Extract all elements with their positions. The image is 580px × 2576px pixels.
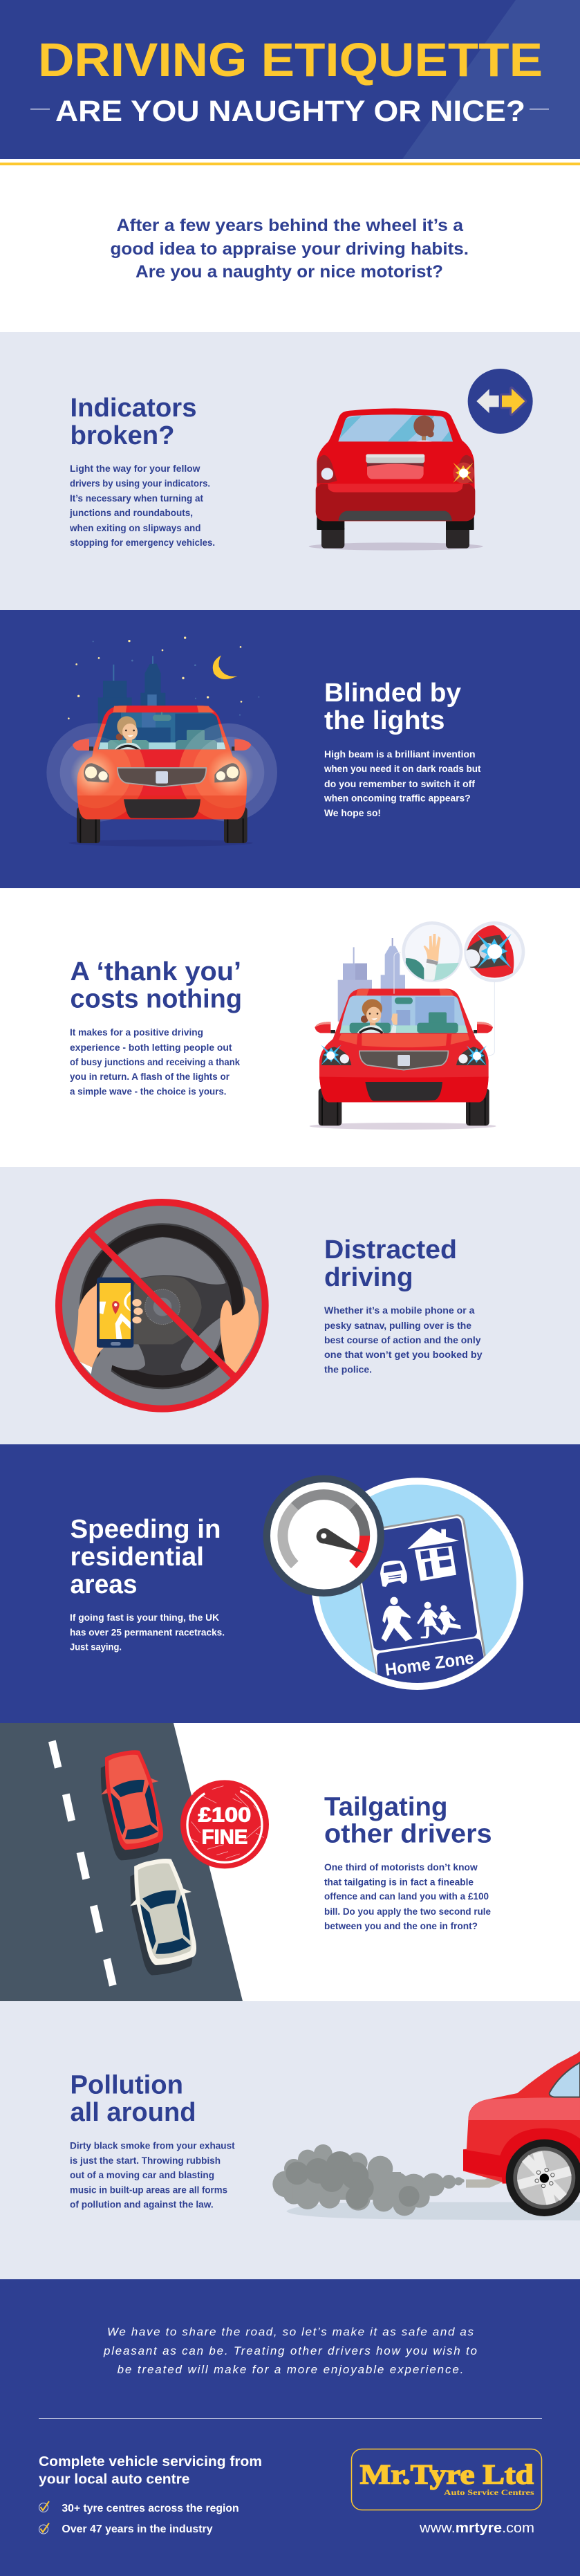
body text: high beam: High beam is a brilliant invention: [324, 748, 476, 760]
body text: indicators: drivers by using your indicators.: [70, 477, 210, 488]
logo: Mr. Tyre Ltd: [351, 2449, 542, 2510]
body text: thank you: you in return. A flash of the lights or: [70, 1071, 230, 1082]
closing quote: We have to share the road, so let’s make it as safe and as: [107, 2326, 474, 2339]
heading: tailgating: [324, 1793, 492, 1849]
car symbol: [380, 1561, 407, 1587]
body text: tailgating: between you and the one in front?: [324, 1920, 478, 1931]
headlight beams on the sky: [46, 723, 277, 822]
body text: indicators: junctions and roundabouts,: [69, 507, 193, 518]
subtitle: ARE YOU NAUGHTY OR NICE?: [55, 95, 525, 128]
speedometer: [263, 1475, 384, 1597]
body text: distracted: one that won’t get you booked by: [324, 1349, 483, 1360]
heading: speeding: areas: [71, 1570, 137, 1599]
body text: high beam: do you remember to switch it off: [324, 778, 475, 789]
body text: indicators: It’s necessary when turning at: [70, 493, 203, 504]
heading: pollution: Pollution: [71, 2071, 183, 2100]
heading: blinded by the lights: Blinded by: [324, 679, 461, 708]
body text: tailgating: [324, 1861, 491, 1931]
heading: indicators broken: Indicators: [71, 394, 196, 423]
body text: speeding: [70, 1612, 225, 1652]
footer strapline: your local auto centre: [39, 2472, 189, 2487]
windscreen with driver: [98, 712, 226, 750]
footer strapline: Complete vehicle servicing from: [39, 2454, 262, 2469]
body text: tailgating: bill. Do you apply the two second rule: [324, 1906, 491, 1917]
stamp: £100 fine: £100: [198, 1803, 251, 1826]
panel: pollution all around: [0, 2001, 580, 2279]
body text: pollution: is just the start. Throwing rubbish: [70, 2155, 221, 2166]
panel: a thank you costs nothing: [70, 921, 525, 1130]
icon: indicator arrows: [468, 369, 533, 434]
heading: tailgating: other drivers: [324, 1820, 492, 1849]
heading: distracted driving: Distracted: [324, 1235, 457, 1264]
heading: distracted driving: driving: [324, 1263, 413, 1292]
home zone sign: Home Zone: [384, 1648, 475, 1680]
heading: tailgating: Tailgating: [324, 1793, 447, 1822]
illustration: rear view of red car: [309, 369, 533, 551]
city skyline: [98, 656, 165, 732]
smoke cloud: [272, 2144, 465, 2216]
title: DRIVING ETIQUETTE: [38, 33, 543, 86]
panel: blinded by the lights: [0, 610, 580, 888]
checklist: [39, 2501, 239, 2535]
car rear: [463, 2051, 580, 2184]
body text: distracted: best course of action and the only: [324, 1334, 481, 1345]
body text: high beam: when oncoming traffic appears?: [324, 793, 471, 804]
footer strapline: [39, 2454, 262, 2487]
body text: indicators: [69, 463, 215, 548]
body text: distracted: the police.: [324, 1364, 372, 1375]
body text: pollution: of pollution and against the law.: [70, 2199, 214, 2210]
intro text: [111, 216, 469, 282]
body text: tailgating: that tailgating is in fact a fineable: [324, 1876, 474, 1887]
logo: Mr. Tyre Ltd: Auto Service Centres: [444, 2487, 534, 2497]
callout: waving hand: [404, 923, 463, 982]
illustration: car exhaust smoke: [272, 2051, 580, 2220]
body text: thank you: [70, 1027, 240, 1097]
body text: distracted: pesky satnav, pulling over is the: [324, 1320, 471, 1331]
checklist: Over 47 years in the industry: [62, 2523, 213, 2535]
illustration: night car with headlights: [46, 636, 277, 847]
body text: speeding: Just saying.: [70, 1641, 122, 1652]
lane markings: [48, 1740, 117, 1987]
grille: [359, 1051, 448, 1101]
body text: indicators: stopping for emergency vehicles.: [70, 537, 215, 548]
illustration: no phone while driving: [59, 1202, 265, 1411]
body text: pollution: [70, 2140, 235, 2210]
heading: thank you: [71, 957, 242, 1014]
body text: speeding: has over 25 permanent racetracks.: [70, 1627, 225, 1638]
panel: tailgating other drivers: [0, 1723, 491, 2001]
body text: pollution: out of a moving car and blasting: [70, 2169, 214, 2180]
callout connector lines: [394, 953, 494, 1056]
headlights: [71, 751, 254, 797]
stamp: £100 fine: FINE: [202, 1826, 247, 1849]
car body: [319, 988, 489, 1102]
body text: indicators: when exiting on slipways and: [69, 522, 200, 533]
body text: thank you: of busy junctions and receiving a thank: [70, 1056, 240, 1067]
heading: speeding: [71, 1515, 221, 1599]
checklist: 30+ tyre centres across the region: [62, 2503, 239, 2514]
heading: speeding: residential: [71, 1543, 204, 1572]
heading: indicators broken: [71, 394, 196, 450]
road: [0, 1723, 243, 2001]
logo: Mr. Tyre Ltd: Mr.Tyre Ltd: [360, 2458, 534, 2490]
body text: distracted: [324, 1305, 483, 1375]
intro text: After a few years behind the wheel it’s a: [116, 216, 464, 235]
body text: high beam: We hope so!: [324, 807, 381, 818]
closing quote: be treated will make for a more enjoyable experience.: [118, 2363, 463, 2376]
grille: [118, 768, 206, 818]
heading: distracted driving: [324, 1235, 457, 1292]
body text: speeding: If going fast is your thing, the UK: [70, 1612, 219, 1623]
heading: thank you: A ‘thank you’: [71, 957, 241, 986]
illustration: home zone sign and speedometer: [263, 1475, 523, 1690]
white car: [121, 1853, 208, 1978]
headlights flashing: [321, 1045, 487, 1066]
intro text: Are you a naughty or nice motorist?: [135, 262, 443, 282]
callout: flashing headlight: [462, 923, 523, 981]
panel: speeding in residential areas: [0, 1444, 580, 1723]
illustration: tailgating cars on road: [48, 1740, 269, 1987]
intro text: good idea to appraise your driving habits.: [111, 239, 469, 259]
sleeve: [97, 1353, 112, 1371]
panel: indicators broken: [0, 332, 580, 610]
side mirrors: [73, 739, 251, 751]
wheel: [506, 2140, 580, 2216]
illustration: car flashing lights with wave: [310, 923, 523, 1130]
body text: tailgating: offence and can land you with a £100: [324, 1890, 489, 1902]
heading: indicators broken: broken?: [71, 421, 174, 450]
body text: high beam: when you need it on dark roads but: [324, 763, 481, 774]
heading: thank you: costs nothing: [71, 985, 242, 1014]
body text: pollution: Dirty black smoke from your exhaust: [70, 2140, 235, 2151]
body text: distracted: Whether it’s a mobile phone or a: [324, 1305, 475, 1316]
heading: blinded by the lights: the lights: [324, 706, 445, 735]
left hand: [74, 1280, 104, 1368]
pedestrians: [382, 1597, 461, 1641]
right hand: [220, 1287, 259, 1373]
heading: speeding: Speeding in: [71, 1515, 221, 1544]
body text: high beam: [324, 748, 481, 818]
body text: indicators: Light the way for your fellow: [70, 463, 200, 474]
body text: tailgating: One third of motorists don’t know: [324, 1861, 478, 1873]
body text: thank you: a simple wave - the choice is yours.: [70, 1086, 227, 1097]
heading: pollution: all around: [71, 2098, 196, 2127]
icon: phone with map: [97, 1278, 133, 1347]
heading: pollution: [71, 2071, 196, 2127]
heading: blinded by the lights: [324, 679, 461, 735]
body text: pollution: music in built-up areas are all forms: [70, 2184, 227, 2195]
house: [407, 1527, 459, 1581]
icon: moon: [213, 655, 237, 679]
closing quote: [103, 2326, 477, 2376]
body text: thank you: experience - both letting people out: [70, 1042, 232, 1053]
stamp: £100 fine: [180, 1780, 269, 1868]
side mirrors: [315, 1022, 493, 1033]
website url: www.mrtyre .com: [419, 2521, 534, 2536]
city skyline: [338, 938, 405, 1022]
exhaust pipe: [466, 2177, 507, 2188]
closing quote: pleasant as can be. Treating other drivers how you wish to: [103, 2344, 477, 2357]
windscreen with driver: [340, 995, 468, 1033]
body text: thank you: It makes for a positive driving: [70, 1027, 203, 1038]
panel: footer: [0, 2279, 580, 2576]
home zone sign: [311, 1478, 523, 1690]
fingers: [132, 1299, 143, 1323]
panel: distracted driving: [0, 1167, 580, 1444]
red car: [93, 1745, 174, 1863]
car body: [77, 706, 247, 819]
header banner: [0, 0, 580, 165]
